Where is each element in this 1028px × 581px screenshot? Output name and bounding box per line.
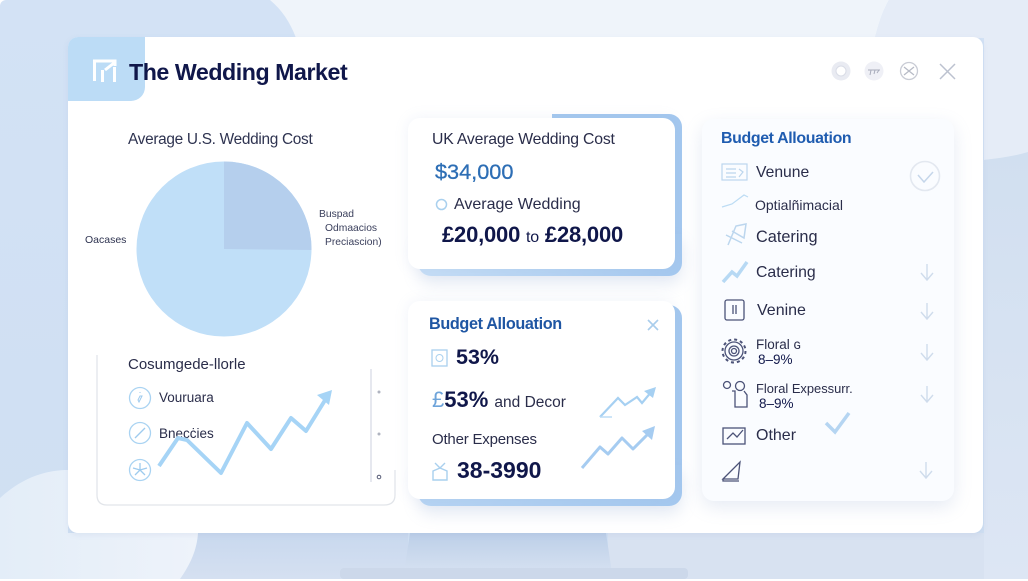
list item [756,381,853,411]
list item: 8–9% [759,396,794,411]
icon [432,462,448,481]
heading: UK Average Wedding Cost [432,131,615,148]
pie label: right: Preciascion) [325,237,382,248]
pie label: left: Oacases [85,234,126,246]
value: 38-3990 [457,457,541,483]
value row: £53% and Decor [432,387,566,412]
heading: Cosumgede-llorle [128,356,246,373]
heading: Budget Allouation [429,315,562,333]
line chart arrow [158,390,332,475]
window controls [832,62,956,80]
pie label: right [319,209,382,248]
heading: average US cost: Average U.S. Wedding Cost [128,131,312,148]
list item: Venune [756,164,809,181]
pie label: right: Odmaacios [325,223,377,234]
value: $34,000 [435,159,513,184]
panel: consumer chart [96,355,396,506]
list item: Venine [757,302,806,319]
list item: Floral ɢ [756,337,801,352]
card body [408,118,675,269]
icon row 1 [128,386,152,410]
label: Other Expenses [432,431,537,448]
list item: Floral Expessurr. [756,381,853,396]
card body [408,301,675,499]
icon [431,349,448,367]
small trend [599,387,656,418]
close icon [648,320,658,330]
pie label: right: Buspad [319,209,354,220]
main window panel [68,37,983,533]
accent edge [652,305,682,475]
icon row 3 [128,458,152,482]
panel: budget list [702,119,954,501]
list item: Catering [756,264,816,281]
list item [756,337,801,367]
title: The Wedding Market [129,59,347,85]
logo icon [93,60,116,82]
list item: Optialñimacial [755,197,843,213]
heading: Budget Allouation [721,130,851,147]
pie chart [136,162,312,336]
list item: 8–9% [758,352,793,367]
label: Vouruara [159,390,214,405]
icon row 2 [128,422,152,444]
label: Average Wedding [454,196,581,213]
list item: Catering [756,228,818,246]
large trend [581,426,655,469]
value: 53% [456,345,499,369]
logo tab [68,37,145,101]
icons column [721,160,940,482]
panel: budget middle [406,305,686,518]
range: £20,000 to £28,000 [442,222,623,247]
list item: Other [756,427,796,444]
label: Bnecċies [159,426,214,441]
panel: UK cost [406,114,686,288]
bullet [436,198,448,210]
accent edge [552,114,682,244]
